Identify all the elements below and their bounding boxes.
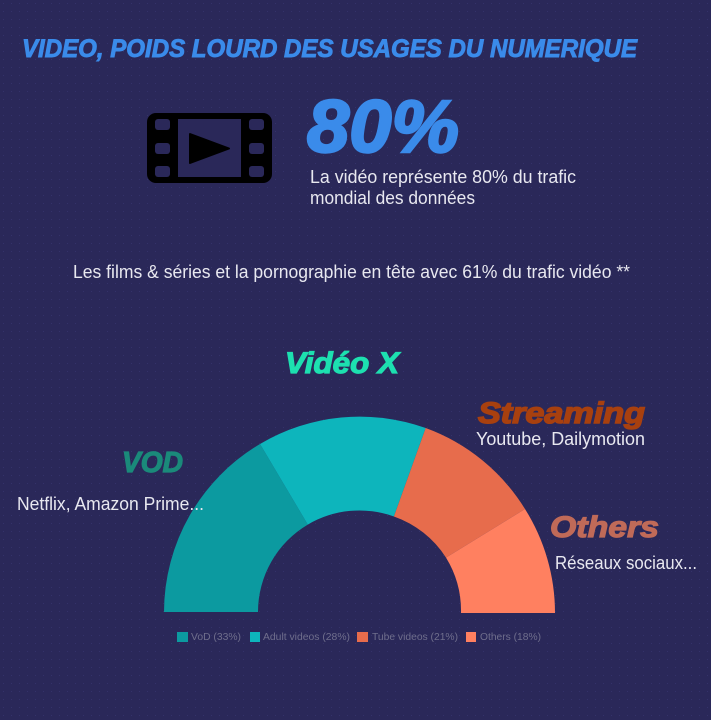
statistic description: mondial des données xyxy=(310,188,475,208)
label: Others: Réseaux sociaux... xyxy=(555,553,697,573)
label: VOD xyxy=(17,447,204,514)
chart legend: Adult videos (28%) xyxy=(263,632,350,643)
segment: Adult videos xyxy=(260,417,426,525)
label: Vidéo X: Vidéo X xyxy=(285,347,401,380)
semi-donut chart xyxy=(164,417,555,613)
chart legend: Tube videos (21%) xyxy=(372,632,458,643)
icon: film strip with play button xyxy=(147,113,272,183)
label: Streaming: Streaming xyxy=(478,397,645,430)
label: Streaming xyxy=(476,397,645,449)
title: VIDEO, POIDS LOURD DES USAGES DU NUMERIQUE xyxy=(22,35,638,63)
label: Others xyxy=(550,511,697,573)
statistic description: La vidéo représente 80% du trafic xyxy=(310,167,576,187)
segment: Tube videos xyxy=(394,428,525,558)
label: VOD: VOD xyxy=(122,447,183,479)
statistic description xyxy=(310,167,576,208)
chart legend: Others (18%) xyxy=(480,632,541,643)
label: VOD: Netflix, Amazon Prime... xyxy=(17,494,204,514)
big statistic 80%: 80% xyxy=(307,85,459,168)
subheading: Les films & séries et la pornographie en tête avec 61% du trafic vidéo ** xyxy=(73,262,630,282)
label: Others: Others xyxy=(550,511,659,544)
segment: VoD xyxy=(164,444,308,612)
chart legend: VoD (33%) xyxy=(191,632,241,643)
segment: Others xyxy=(446,509,555,613)
chart legend xyxy=(177,632,541,643)
label: Streaming: Youtube, Dailymotion xyxy=(476,429,645,449)
